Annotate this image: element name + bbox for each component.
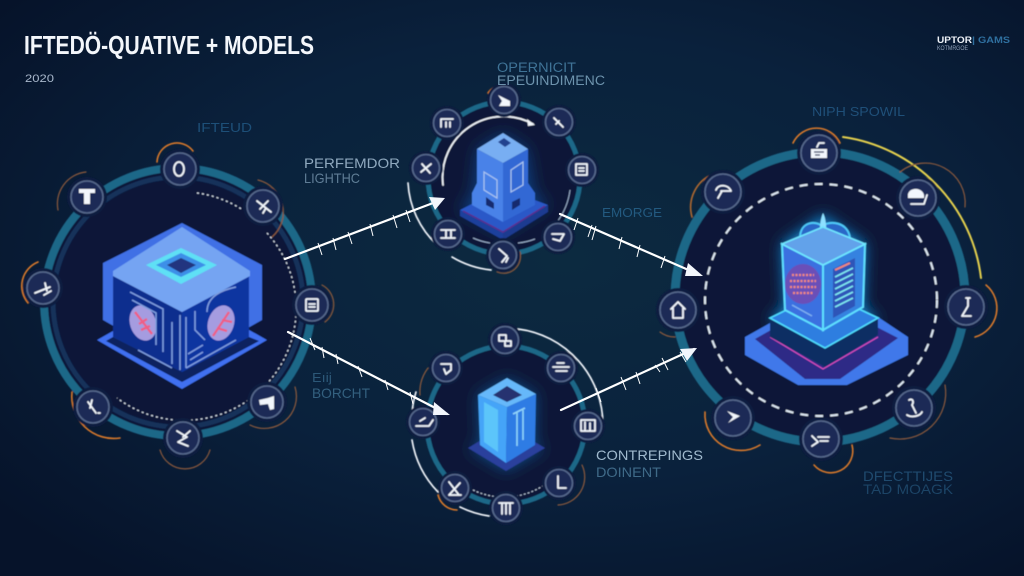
- label: left top: IFTEUD: [197, 120, 252, 135]
- top ring: [428, 102, 580, 254]
- node: slide: [406, 405, 440, 439]
- node: grid: [565, 153, 599, 187]
- label: objectives: DFECTTIJES: [863, 468, 953, 484]
- node: cans: [488, 323, 522, 357]
- node: tool: [243, 186, 283, 226]
- left ring: [44, 168, 312, 436]
- label: lower left: [312, 370, 370, 401]
- panel: bottom middle model cycle: [406, 323, 605, 525]
- node: pin: [542, 105, 576, 139]
- label: top tower: EPEUINDIMENC: [497, 73, 605, 88]
- node: table: [489, 491, 523, 525]
- brand logo: KOTMRGOE: [937, 45, 969, 52]
- right nodes: [656, 131, 988, 461]
- bottom nodes: [406, 323, 605, 525]
- node: cross: [438, 471, 472, 505]
- label: bottom tower: CONTREPINGS: [596, 447, 703, 463]
- node: car: [544, 351, 578, 385]
- tower top fins: [800, 223, 850, 238]
- brand logo: | GAMS: [972, 35, 1010, 45]
- node: tag: [160, 149, 200, 189]
- node: gears: [541, 220, 575, 254]
- label: objectives: [863, 468, 954, 497]
- cube left-face circuit: [125, 292, 180, 370]
- node: hook: [429, 351, 463, 385]
- brand logo: [937, 35, 1010, 52]
- node: chart: [571, 409, 605, 443]
- label: emerge: EMORGE: [602, 205, 662, 220]
- node: pliers: [73, 387, 113, 427]
- panel: top middle model cycle: [408, 83, 599, 273]
- label: performance: [304, 155, 400, 186]
- tower glow: [770, 215, 878, 352]
- left orange arcs: [22, 143, 334, 469]
- left dotted orbit: [117, 193, 296, 420]
- label: objectives: TAD MOAGK: [863, 481, 954, 497]
- node: helmet: [701, 170, 745, 214]
- top orbit arcs: [408, 85, 596, 273]
- tower left panel: [785, 264, 821, 316]
- bottom tower: [468, 378, 545, 471]
- tower plinth: [770, 318, 878, 367]
- label: lower left: BORCHT: [312, 385, 370, 401]
- title: IFTEDÖ-QUATIVE + MODELS: [24, 30, 314, 60]
- right glowing tower: [745, 213, 908, 385]
- node: screen: [430, 106, 464, 140]
- panel: left model cycle: [22, 143, 334, 469]
- label: top tower: [497, 60, 605, 88]
- arrow: top tower to right circle: [560, 214, 703, 276]
- node: pipes: [431, 217, 465, 251]
- left nodes: [23, 149, 332, 458]
- node: hammer: [247, 382, 287, 422]
- arrow: left cube to bottom tower: [288, 332, 450, 415]
- node: truck: [487, 83, 521, 117]
- arrow: left cube to top tower: [285, 197, 445, 259]
- label: bottom tower: [596, 447, 703, 480]
- node: house: [656, 288, 700, 332]
- node: drill: [799, 417, 843, 461]
- right accent arcs: [660, 128, 997, 473]
- right ring: [675, 152, 965, 442]
- tower right panel: [833, 258, 855, 318]
- tower base: [745, 317, 908, 385]
- node: wrench: [23, 268, 63, 308]
- node: knot: [163, 418, 203, 458]
- label: right top: NIPH SPOWIL: [812, 104, 905, 119]
- node: cup: [67, 177, 107, 217]
- node: cap: [896, 176, 940, 220]
- label: performance: LIGHTHC: [304, 170, 360, 186]
- node: angle: [542, 466, 576, 500]
- label: lower left: Eıij: [312, 370, 332, 385]
- cube right-face circuit: [186, 287, 239, 368]
- top nodes: [409, 83, 599, 272]
- node: forklift: [797, 131, 841, 175]
- label: bottom tower: DOINENT: [596, 464, 661, 480]
- node: blade: [711, 396, 755, 440]
- right dashed orbit: [705, 184, 937, 416]
- label: top tower: OPERNICIT: [497, 60, 576, 75]
- left cube: [97, 223, 267, 389]
- label: performance: PERFEMDOR: [304, 155, 400, 171]
- node: lamp: [944, 285, 988, 329]
- panel: right model cycle: [656, 128, 997, 473]
- tower faces: [782, 244, 823, 330]
- bottom orbit arcs: [412, 329, 603, 516]
- node: crane: [892, 386, 936, 430]
- node: fork: [409, 151, 443, 185]
- arrow: bottom tower to right circle: [561, 348, 697, 410]
- bottom ring: [427, 346, 585, 504]
- brand logo: UPTOR: [937, 35, 973, 45]
- year: 2020: [25, 73, 54, 85]
- node: clamp: [486, 238, 520, 272]
- top tower: [460, 133, 548, 240]
- node: chip: [292, 285, 332, 325]
